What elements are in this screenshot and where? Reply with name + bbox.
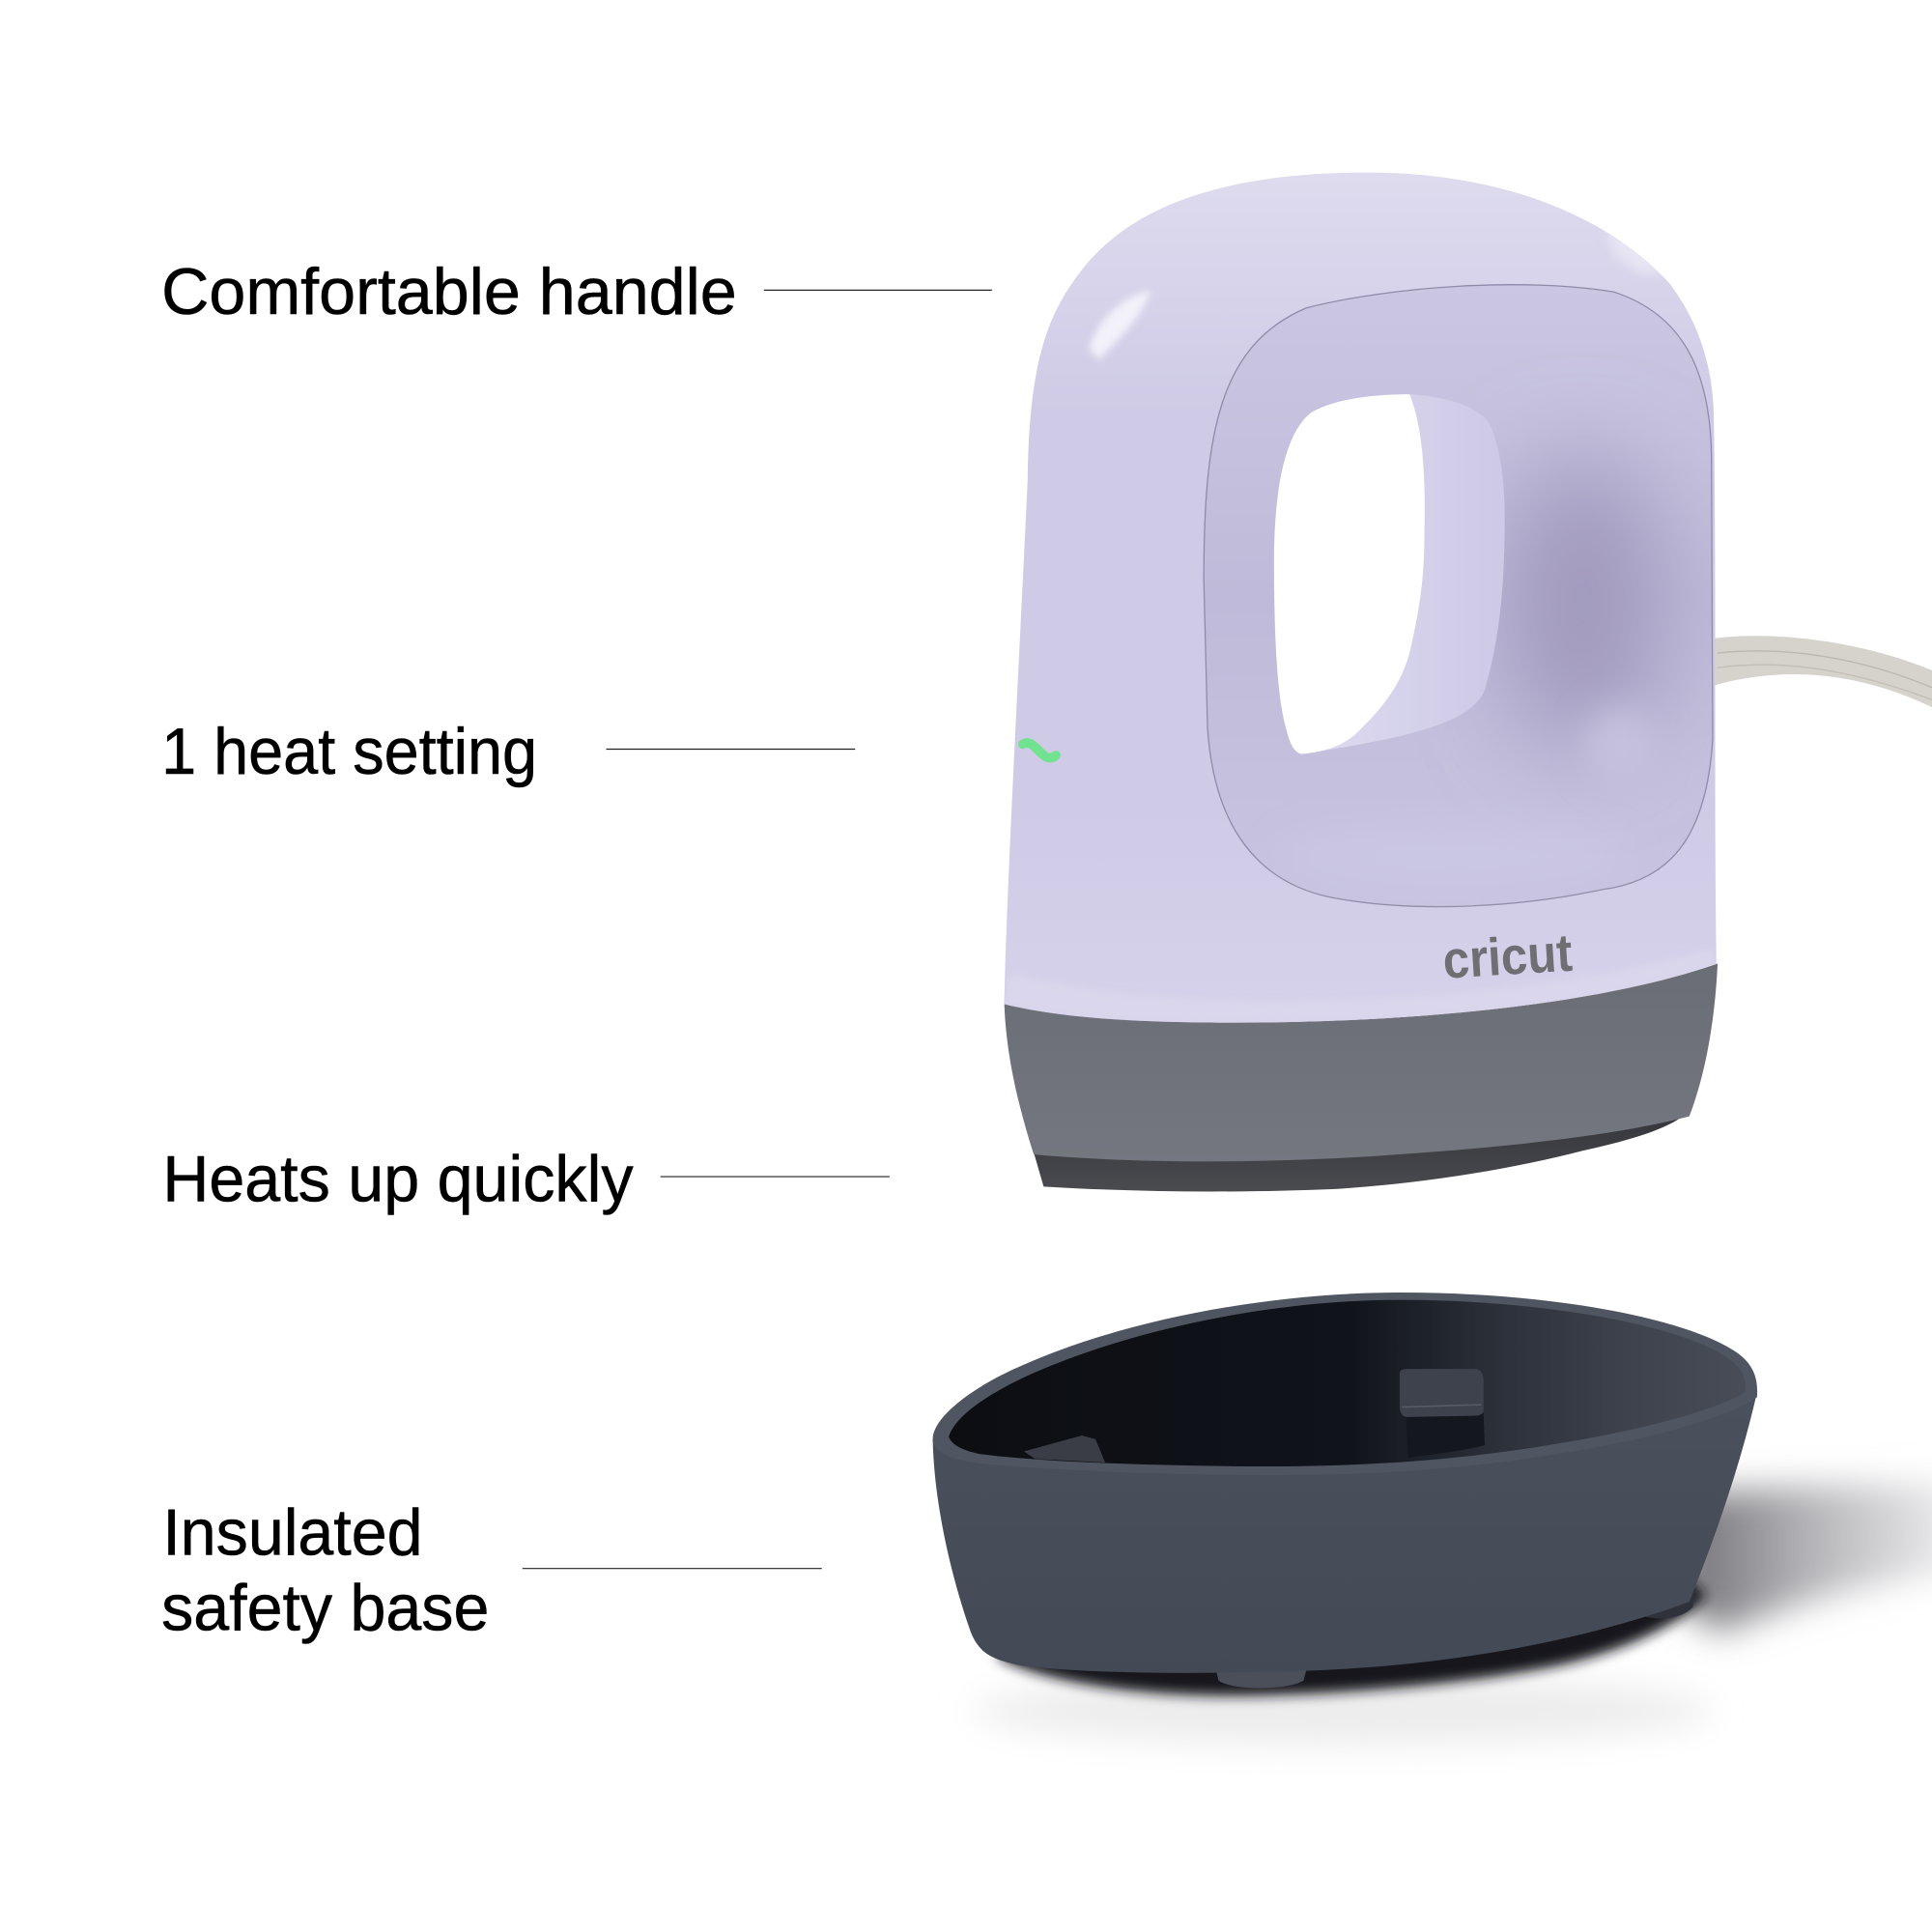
handle opening	[1274, 394, 1425, 754]
callout: insulated safety base	[161, 1497, 822, 1644]
lavender body	[1005, 173, 1717, 1023]
callout: heats up quickly: Heats up quickly	[162, 1144, 634, 1216]
tray rim	[933, 1293, 1757, 1475]
tray body	[933, 1392, 1757, 1673]
callout: 1 heat setting: 1 heat setting	[161, 716, 537, 788]
callout: insulated safety base: Insulated	[162, 1497, 422, 1570]
power cord	[1716, 636, 1932, 707]
callout: insulated safety base: safety base	[161, 1572, 489, 1644]
soleplate	[1033, 1112, 1690, 1191]
tray interior	[949, 1300, 1746, 1466]
handle inner wall	[1301, 394, 1505, 754]
product: safety base	[933, 1293, 1932, 1745]
status light	[1023, 743, 1056, 758]
brand logo: cricut	[1441, 923, 1574, 990]
grey heat band	[1005, 963, 1718, 1161]
product: mini iron	[1005, 173, 1932, 1191]
feet	[1215, 1665, 1307, 1688]
rear support post	[1400, 1369, 1485, 1458]
glossy highlight	[1005, 208, 1713, 1023]
handle recess	[1204, 285, 1713, 907]
cast shadow	[974, 1485, 1932, 1745]
front support post	[1024, 1435, 1105, 1463]
callout: comfortable handle: Comfortable handle	[161, 256, 737, 328]
